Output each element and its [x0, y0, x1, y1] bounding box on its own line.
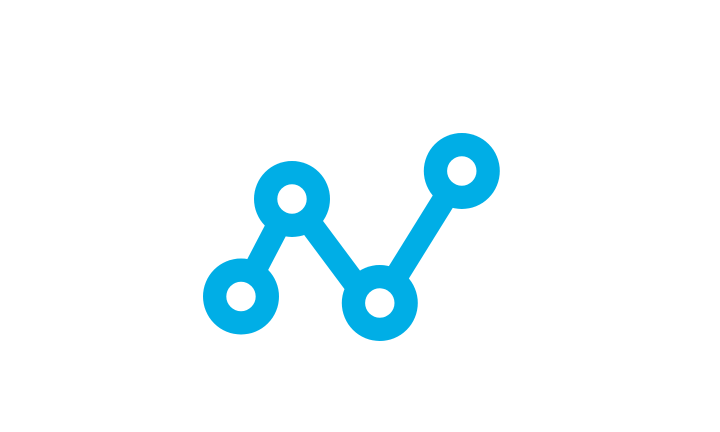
- node 1: [203, 258, 279, 334]
- node 4: [424, 133, 500, 209]
- node 3: [342, 265, 418, 341]
- node 2: [254, 161, 330, 237]
- connecting line: [241, 171, 462, 303]
